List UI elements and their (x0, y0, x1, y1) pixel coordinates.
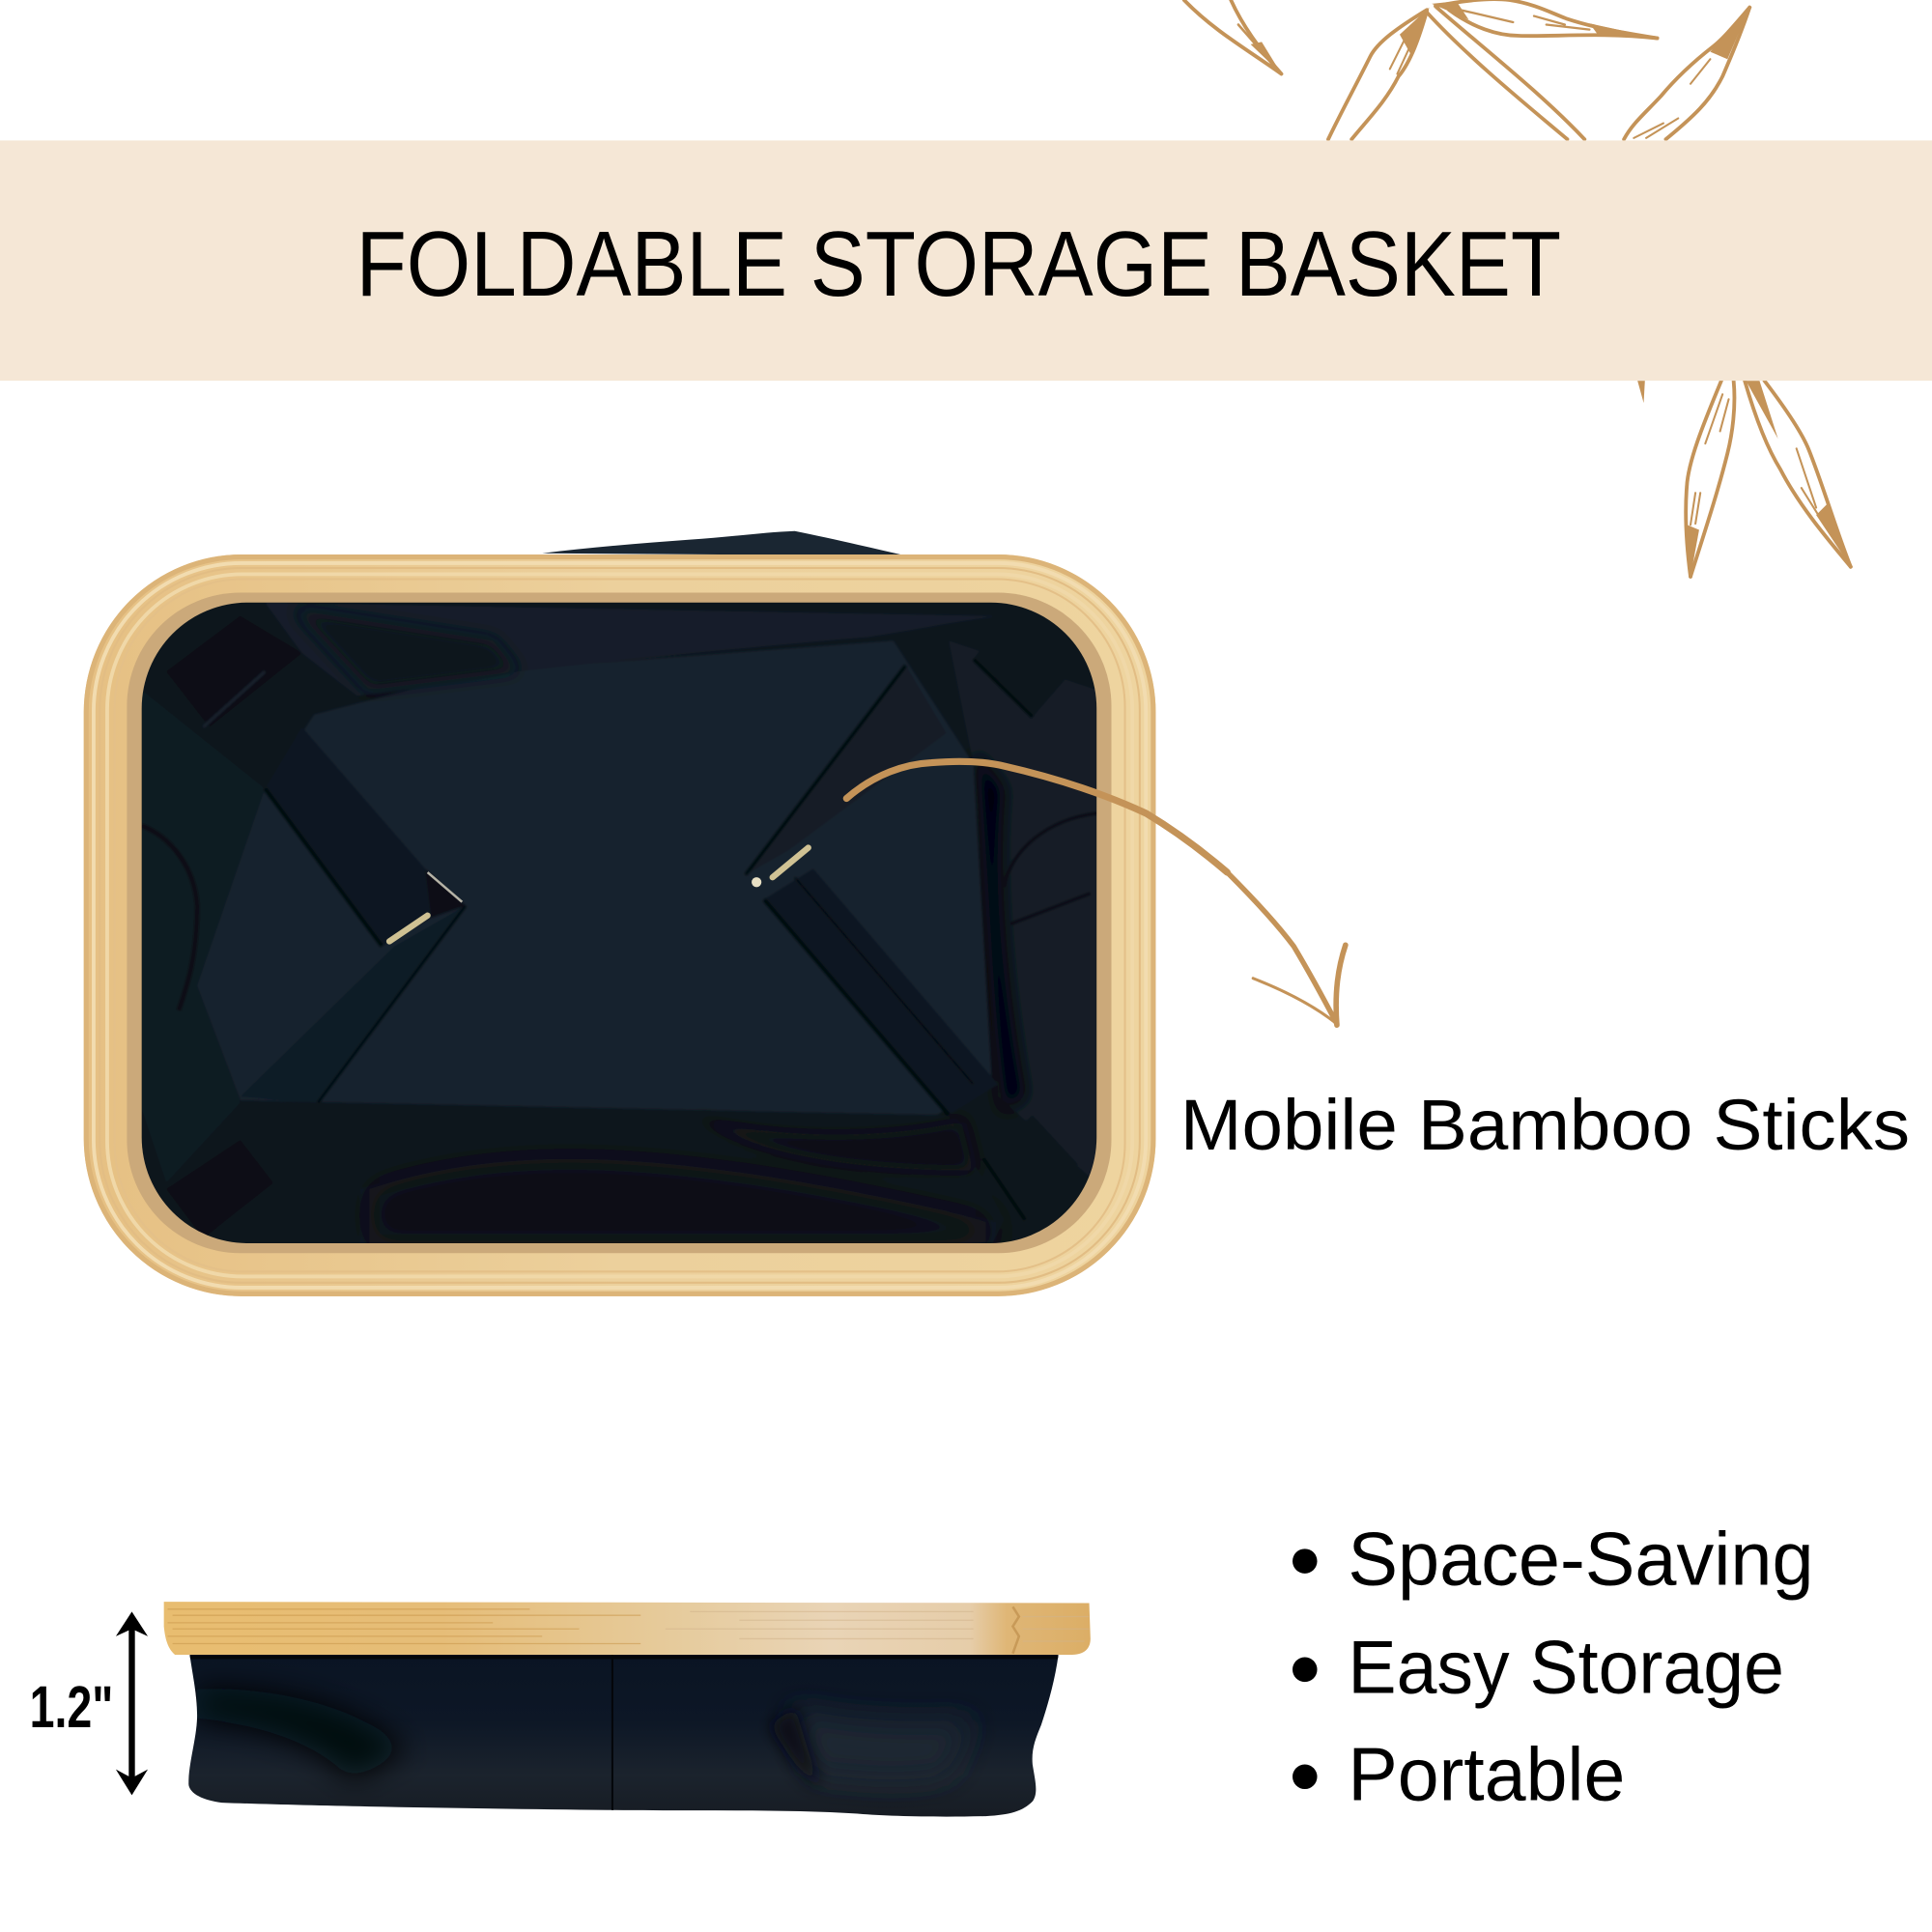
bullet: space-saving: Space-Saving (1348, 1518, 1814, 1601)
curved arrow to bamboo sticks (846, 761, 1346, 1025)
height arrow (116, 1611, 148, 1795)
title band (0, 140, 1932, 381)
metal pins (389, 916, 428, 941)
corner strap: top left (166, 616, 301, 727)
leaf: small fragment under band (1637, 381, 1645, 403)
inner brown lip (127, 593, 1112, 1253)
left upper sleeve (265, 727, 431, 947)
right wall (949, 640, 1096, 1182)
leaf: right from node (1432, 0, 1658, 39)
bullet: easy storage: Easy Storage (1348, 1627, 1784, 1710)
bamboo lid (164, 1602, 1091, 1655)
floor (197, 640, 992, 1115)
callout label: Mobile Bamboo Sticks (1180, 1085, 1910, 1165)
title: FOLDABLE STORAGE BASKET (356, 213, 1561, 316)
right upper sleeve (750, 667, 908, 871)
leaf: top-left fragment (1184, 0, 1282, 74)
bullet list (1293, 1518, 1814, 1817)
side-view basket photo (164, 1602, 1091, 1824)
bamboo stem (1427, 8, 1584, 139)
left lower sleeve (241, 906, 466, 1103)
bullet: portable: Portable (1348, 1734, 1625, 1817)
top flap (265, 603, 998, 696)
leaf: hanging right (1745, 381, 1851, 567)
leaf: lower-left from node (1328, 8, 1430, 139)
corner strap: bottom left (166, 1140, 273, 1238)
decorative bamboo leaves (1184, 0, 1851, 577)
leaf: hanging left (1685, 381, 1734, 577)
corner strap: bottom right (983, 1115, 1078, 1220)
top-view basket photo (84, 531, 1155, 1296)
leaf: upper right (1624, 8, 1749, 139)
fabric interior (135, 598, 1103, 1251)
left wall (142, 788, 266, 1010)
bamboo rim (84, 554, 1155, 1296)
right lower sleeve (764, 868, 998, 1115)
fabric protruding above rim (542, 531, 906, 555)
height label: 1.2" (30, 1674, 113, 1740)
fabric body (185, 1651, 1065, 1824)
bottom flap (166, 1103, 1005, 1244)
corner strap: top right (974, 651, 1065, 717)
